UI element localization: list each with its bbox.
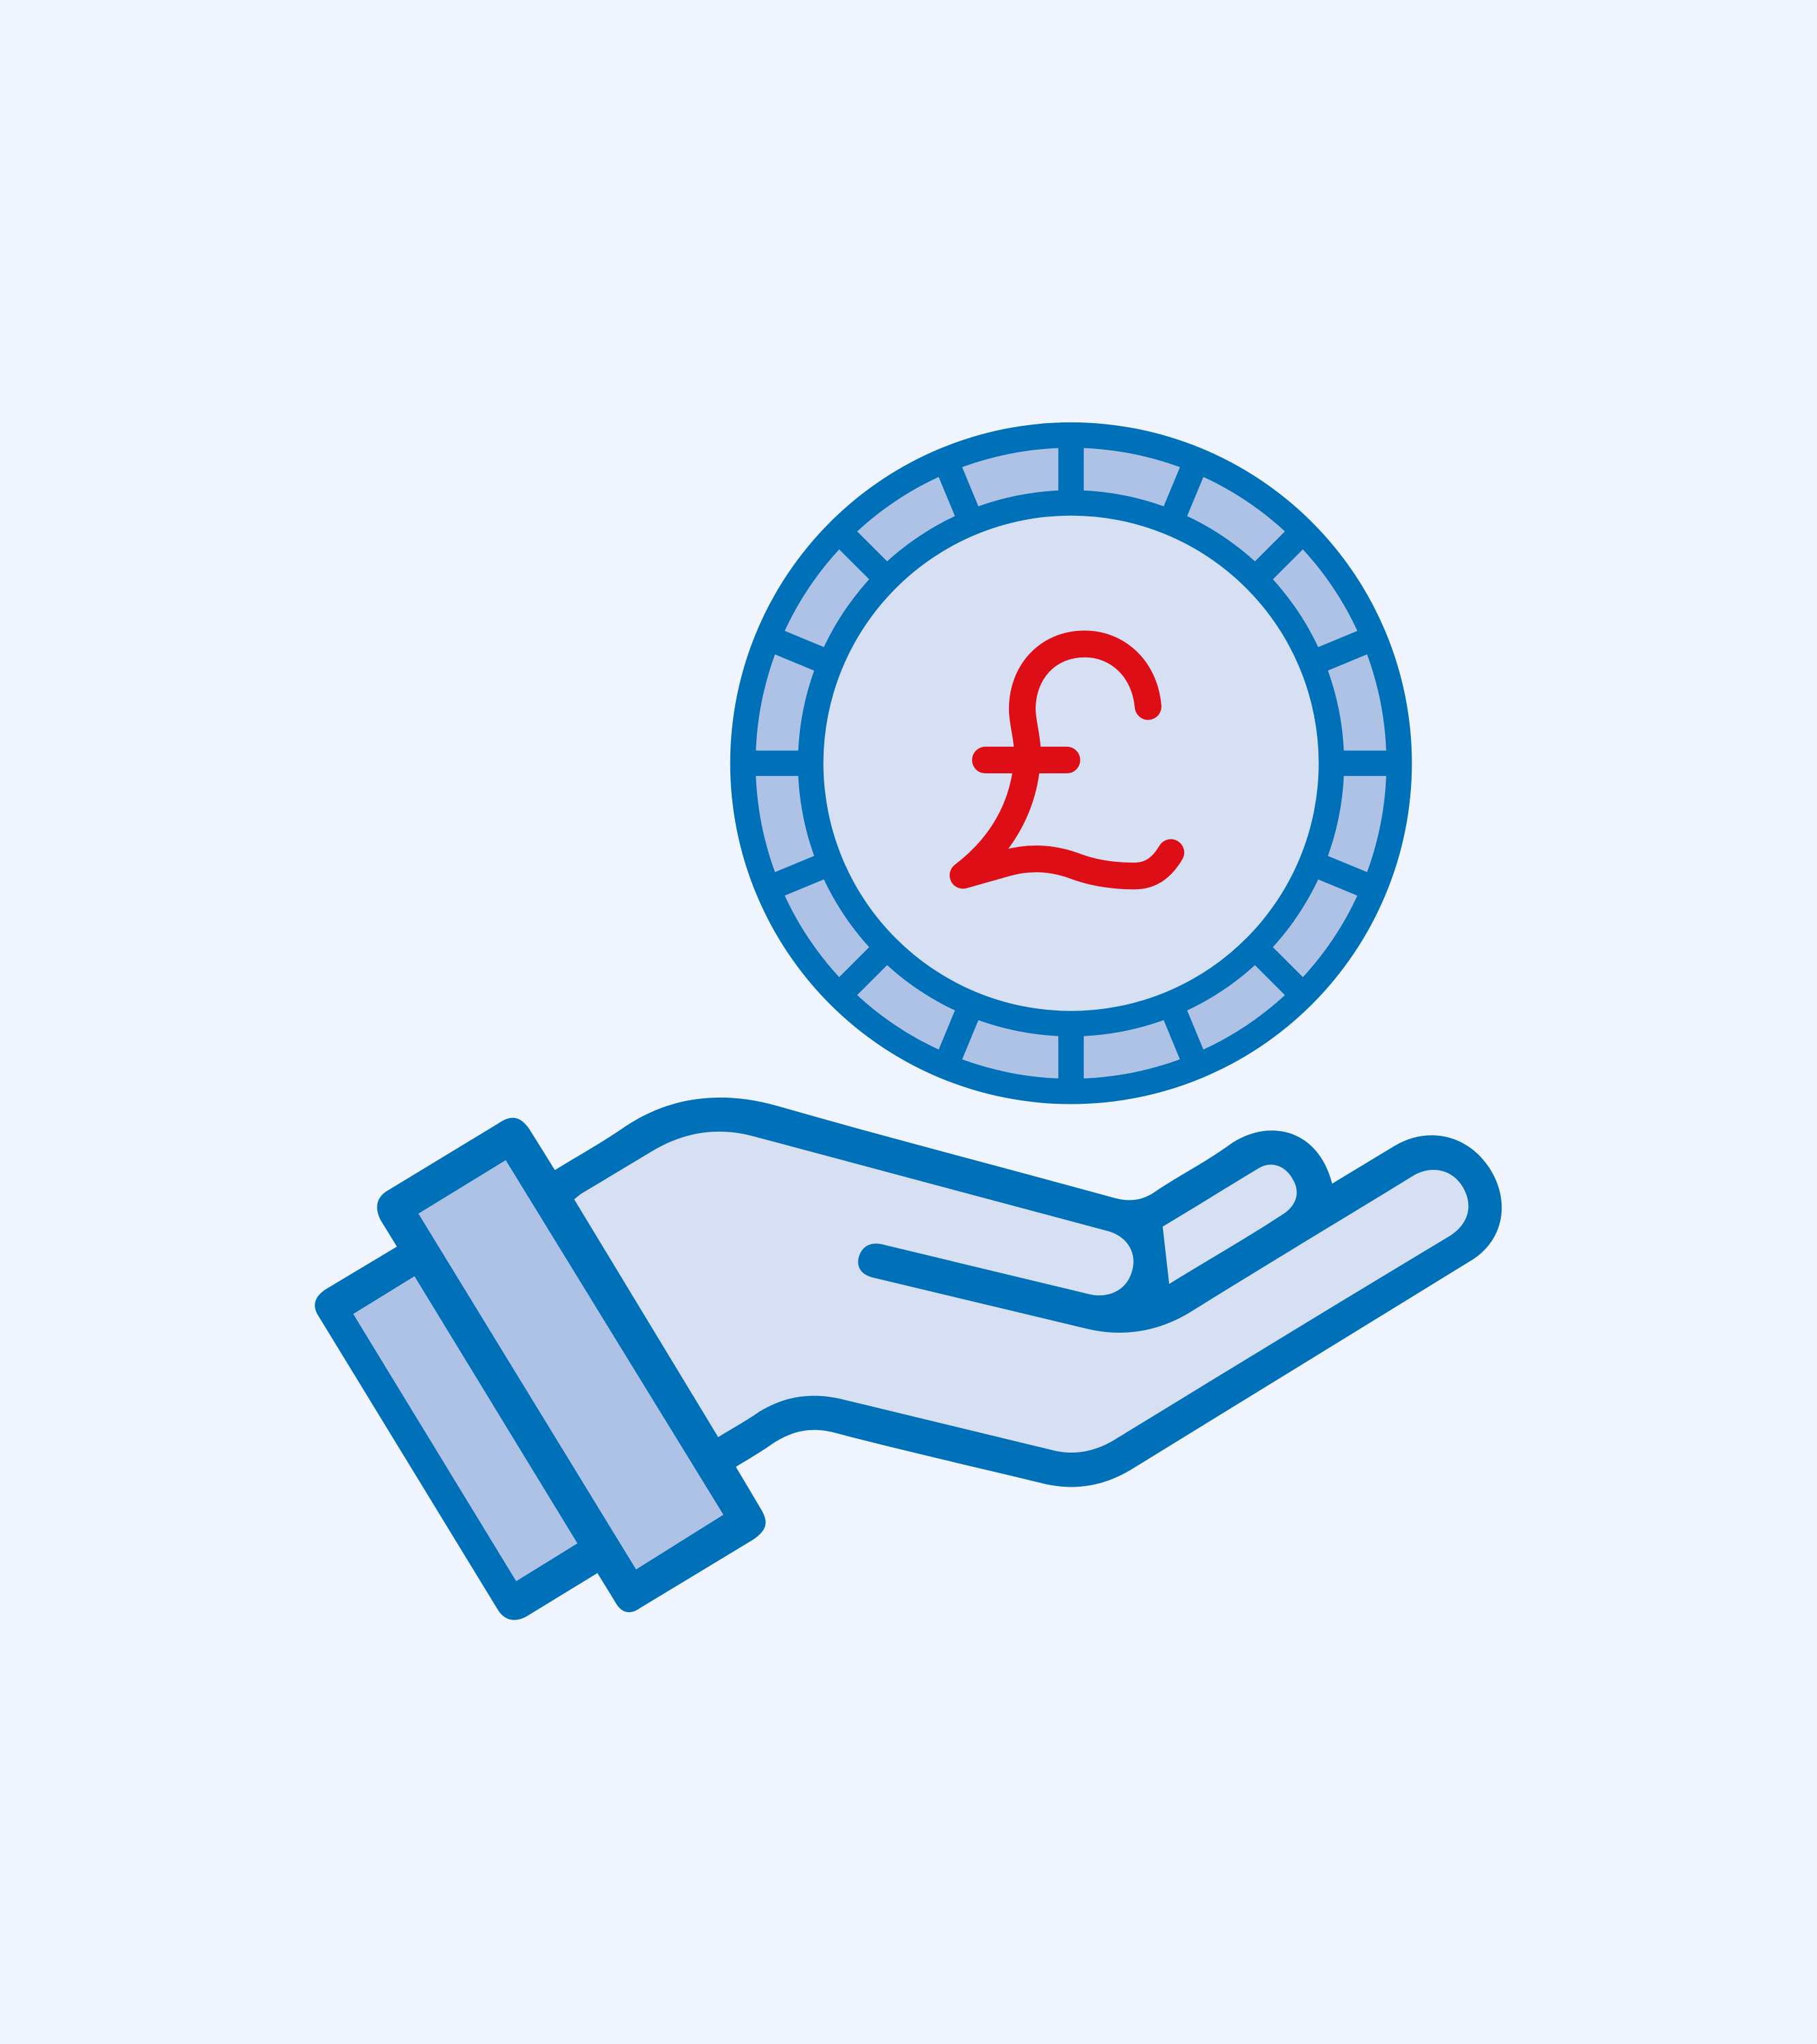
coin inner ring [798,490,1344,1036]
coin face [824,516,1319,1011]
icon: open hand [315,1098,1502,1620]
small cuff fill [353,1276,578,1581]
icon: pound coin [730,422,1412,1104]
coin edge spokes [745,437,1397,1089]
large cuff fill [418,1160,724,1570]
icon: pound symbol [963,644,1171,876]
coin edge band [756,448,1386,1079]
palm and fingers fill [574,1132,1468,1453]
hand outline [548,1098,1502,1512]
small cuff outline [315,1239,612,1620]
large cuff outline [377,1118,766,1612]
coin outer rim [730,422,1412,1104]
thumb fill [1163,1164,1296,1284]
